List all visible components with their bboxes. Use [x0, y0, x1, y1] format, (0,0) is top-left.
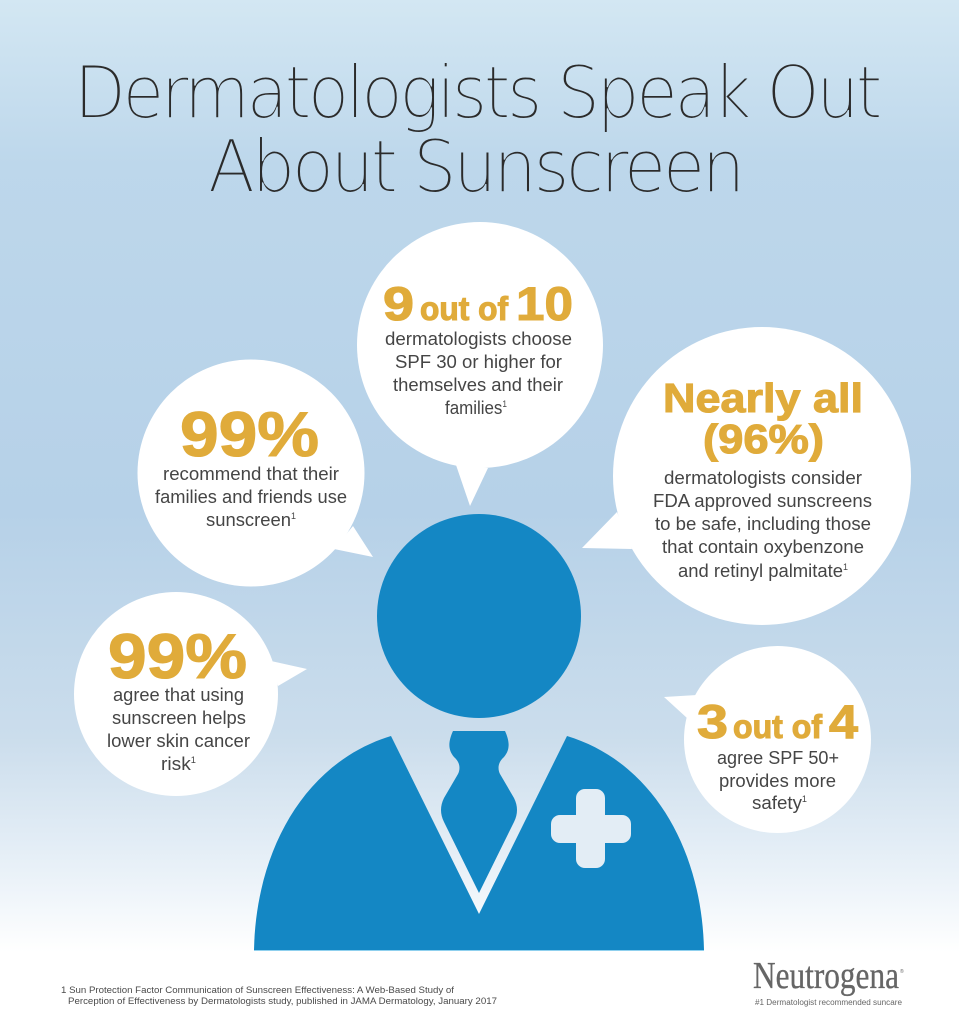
speech bubble: 99% recommend: [138, 360, 373, 586]
text: agree: agree that using: [113, 684, 244, 705]
text: SPF 30 or higher: 1: [502, 399, 507, 409]
text: SPF 30 or higher: themselves and their: [393, 374, 563, 395]
text: FDA approved: to be safe, including those: [655, 513, 871, 534]
text: FDA approved: [653, 467, 872, 581]
stat: 3 out of 4: [697, 695, 858, 748]
shoulders: [254, 736, 704, 950]
stat: Nearly all (96%): [663, 375, 863, 462]
title: [74, 50, 879, 208]
text: SPF 30 or higher: [385, 328, 572, 418]
stat: Nearly all (96%): Nearly all: [663, 375, 863, 421]
speech bubble: 3 out of 4: [664, 646, 871, 833]
text: recommend: families and friends use: [155, 486, 347, 507]
logo: Neutrogena: ®: [900, 968, 904, 975]
stat: 3 out of 4: 3: [697, 695, 728, 748]
speech bubble: 9 out of 10: [357, 222, 603, 506]
medical cross: [551, 789, 631, 868]
text: FDA approved: and retinyl palmitate: [678, 560, 844, 581]
text: agree: sunscreen helps: [112, 707, 246, 728]
text: SPF 50+: agree SPF 50+: [717, 747, 839, 768]
text: agree: risk: [161, 753, 190, 774]
text: FDA approved: that contain oxybenzone: [662, 536, 864, 557]
stat: 3 out of 4: 4: [829, 695, 858, 748]
stat: 9 out of 10: out of: [420, 290, 509, 327]
text: SPF 50+: provides more: [719, 770, 836, 791]
speech bubble: 99% agree: [74, 592, 307, 796]
speech bubble: nearly all: [582, 327, 911, 625]
text: FDA approved: 1: [843, 562, 848, 572]
text: SPF 30 or higher: dermatologists choose: [385, 328, 572, 349]
text: recommend: 1: [291, 511, 296, 521]
text: agree: [107, 684, 250, 774]
stat: Nearly all (96%): (96%): [703, 416, 824, 462]
tie: [441, 731, 517, 893]
head: [377, 514, 581, 718]
footnote: [61, 985, 497, 1007]
logo: Neutrogena: Neutrogena: [753, 955, 899, 997]
text: FDA approved: dermatologists consider: [664, 467, 862, 488]
stat: 99%: 99%: [180, 400, 319, 470]
text: SPF 30 or higher: families: [445, 397, 508, 418]
text: SPF 50+: [717, 747, 839, 813]
stat: 3 out of 4: out of: [733, 708, 823, 745]
stat: 9 out of 10: [383, 277, 573, 330]
text: SPF 30 or higher: SPF 30 or higher for: [395, 351, 562, 372]
stat: 9 out of 10: 10: [516, 277, 573, 330]
title: About Sunscreen: [208, 124, 742, 208]
icon: dermatologist figure: [254, 514, 704, 950]
text: FDA approved: FDA approved sunscreens: [653, 490, 872, 511]
text: agree: 1: [191, 755, 196, 765]
text: recommend: sunscreen: [206, 509, 291, 530]
logo: Neutrogena: #1 Dermatologist recommended suncare: [755, 998, 902, 1007]
text: recommend: [155, 463, 347, 530]
footnote: Perception of Effectiveness by Dermatologists study, published in JAMA Dermatology, January 2017: [68, 996, 497, 1007]
footnote: 1 Sun Protection Factor Communication of Sunscreen Effectiveness: A Web-Based Study of: [61, 985, 454, 996]
text: SPF 50+: safety: [752, 792, 801, 813]
title: Dermatologists Speak Out: [74, 50, 879, 134]
stat: 99%: 99%: [108, 622, 247, 692]
text: SPF 50+: 1: [802, 794, 807, 804]
text: recommend: recommend that their: [163, 463, 339, 484]
text: agree: lower skin cancer: [107, 730, 250, 751]
stat: 9 out of 10: 9: [383, 277, 414, 330]
